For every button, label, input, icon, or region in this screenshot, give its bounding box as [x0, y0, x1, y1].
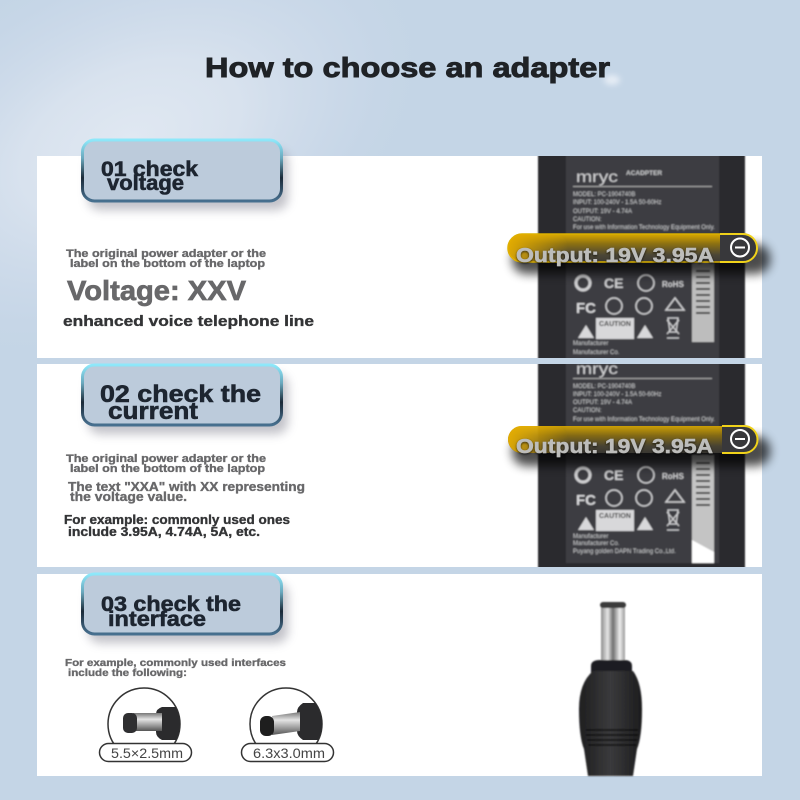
adapter label photo 1: For use with Information Technology Equipment Only. [573, 225, 715, 231]
body text: The text "XXA" with XX representing [68, 480, 305, 494]
yellow output callout [508, 234, 770, 274]
connector: 6.3x3.0mm: 6.3x3.0mm [253, 746, 325, 761]
body text [64, 453, 305, 539]
adapter label photo 2: CAUTION: [573, 408, 602, 414]
adapter label photo 1: INPUT: 100-240V - 1.5A 50-60Hz [573, 200, 661, 206]
heading: 02 check the current [82, 365, 288, 434]
heading: 02 check the current: 02 check the [100, 381, 261, 408]
adapter label photo 1: Manufacturer Co. [573, 350, 620, 356]
body text: enhanced voice telephone line [63, 314, 314, 330]
body text [65, 657, 286, 679]
body text: the voltage value. [70, 490, 187, 504]
adapter label photo 1: mryc [576, 169, 618, 186]
adapter label photo 1: Manufacturer [573, 341, 608, 347]
adapter label photo 2: OUTPUT: 19V - 4.74A [573, 400, 632, 406]
body text: label on the bottom of the laptop [70, 258, 265, 270]
connector: 6.3x3.0mm [242, 688, 334, 762]
adapter label photo 1: ACADPTER [626, 170, 662, 177]
yellow output callout: Output: 19V 3.95A [516, 435, 713, 458]
connector: 5.5x2.5mm [100, 688, 192, 762]
yellow output callout: Output: 19V 3.95A [516, 244, 714, 267]
adapter label photo 1: OUTPUT: 19V - 4.74A [573, 209, 632, 215]
large connector plug [579, 602, 642, 776]
body text: For example: commonly used ones [64, 513, 290, 527]
body text: For example, commonly used interfaces [65, 657, 286, 669]
panel: check interface [37, 574, 762, 776]
body text [63, 248, 314, 330]
adapter label photo 2: FC [576, 492, 596, 509]
connector: 5.5x2.5mm: 5.5×2.5mm [111, 746, 183, 761]
body text: label on the bottom of the laptop [70, 463, 265, 475]
heading: 03 check the interface: interface [108, 608, 206, 631]
adapter label photo 1 [538, 150, 745, 360]
adapter label photo 1: RoHS [662, 280, 684, 289]
adapter label photo 2: CAUTION [599, 513, 631, 520]
adapter label photo 2: mryc [576, 361, 618, 378]
adapter label photo 2: INPUT: 100-240V - 1.5A 50-60Hz [573, 392, 661, 398]
body text: The original power adapter or the [66, 248, 266, 260]
heading: 03 check the interface [82, 574, 288, 643]
adapter label photo 2: Puyang golden DAPN Trading Co.,Ltd. [573, 549, 676, 555]
panel: check current [37, 360, 770, 570]
panel: check voltage [37, 150, 770, 360]
heading: 02 check the current: current [108, 398, 198, 425]
heading: 03 check the interface: 03 check the [101, 593, 241, 616]
body text: Voltage: XXV [67, 275, 246, 306]
adapter label photo 2: Manufacturer Co. [573, 541, 620, 547]
adapter label photo 2: CE [604, 467, 623, 483]
yellow output callout [508, 426, 770, 466]
heading: 01 check voltage: 01 check [101, 158, 198, 181]
heading: 01 check voltage: voltage [107, 172, 184, 195]
adapter label photo 2 [538, 360, 745, 570]
body text: include 3.95A, 4.74A, 5A, etc. [68, 525, 260, 539]
adapter label photo 1: FC [576, 300, 596, 317]
adapter label photo 2: RoHS [662, 472, 684, 481]
adapter label photo 2: Manufacturer [573, 534, 608, 540]
heading: 01 check voltage [82, 140, 288, 210]
adapter label photo 1: CE [604, 275, 623, 291]
title: How to choose an adapter [205, 52, 610, 83]
body text: The original power adapter or the [66, 453, 266, 465]
adapter label photo 1: MODEL: PC-1904740B [573, 192, 635, 198]
adapter label photo 1: CAUTION: [573, 217, 602, 223]
adapter label photo 2: For use with Information Technology Equipment Only. [573, 417, 715, 423]
adapter label photo 1: CAUTION [599, 321, 631, 328]
adapter label photo 2: MODEL: PC-1904740B [573, 384, 635, 390]
body text: include the following: [68, 667, 187, 679]
